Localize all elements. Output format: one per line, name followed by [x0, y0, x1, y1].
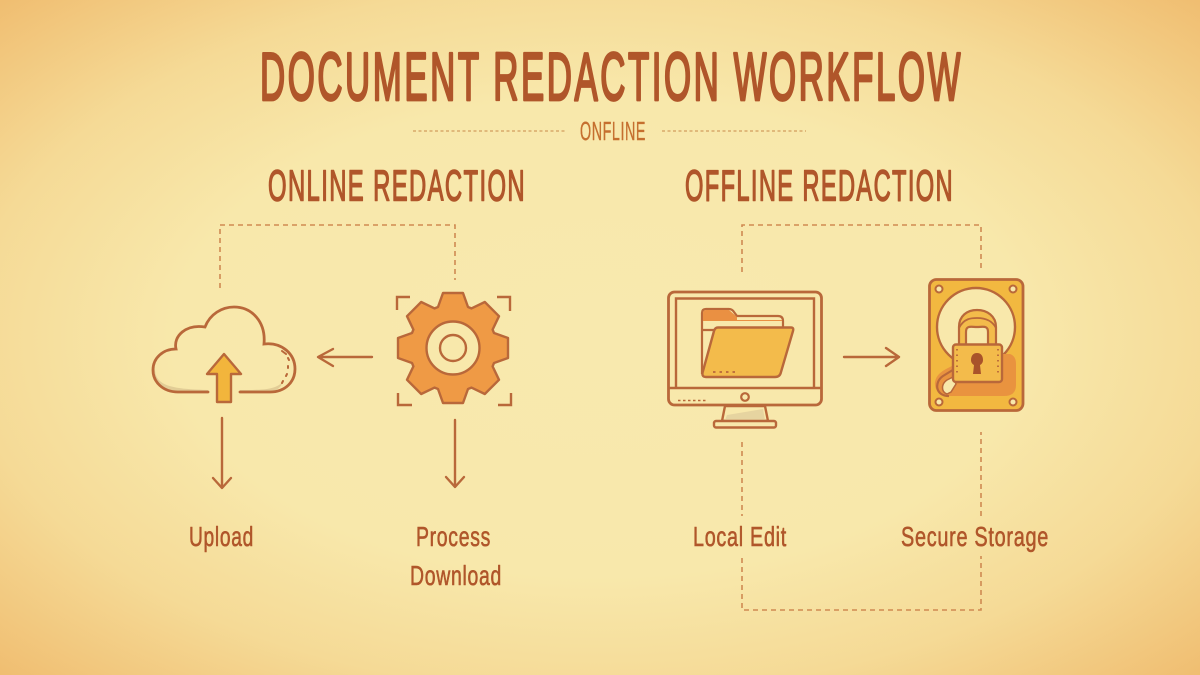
heading: online redaction: ONLINE REDACTION [268, 162, 526, 210]
icon: cloud upload [153, 307, 295, 402]
subtitle: onfline with dotted rules: ONFLINE [580, 116, 646, 146]
label: process download: Download [410, 560, 502, 591]
label: secure storage: Secure Storage [901, 521, 1049, 552]
arrow: cloud to upload [213, 418, 231, 488]
heading: offline redaction: OFFLINE REDACTION [685, 162, 954, 210]
label: process download: Process [416, 521, 491, 552]
arrow: local edit to storage [844, 348, 899, 366]
label: local edit: Local Edit [693, 521, 787, 552]
arrow: gear to process [446, 420, 464, 487]
label: upload: Upload [189, 521, 254, 552]
label: process download [410, 521, 502, 591]
arrow: process to cloud [318, 349, 372, 366]
icon: monitor with folder [668, 292, 822, 428]
icon: locked hard drive [930, 280, 1023, 410]
dashed connector: offline top [742, 225, 981, 272]
dashed connector: offline bottom [742, 432, 981, 610]
dashed connector: online [220, 225, 455, 288]
icon: gear [397, 293, 511, 405]
